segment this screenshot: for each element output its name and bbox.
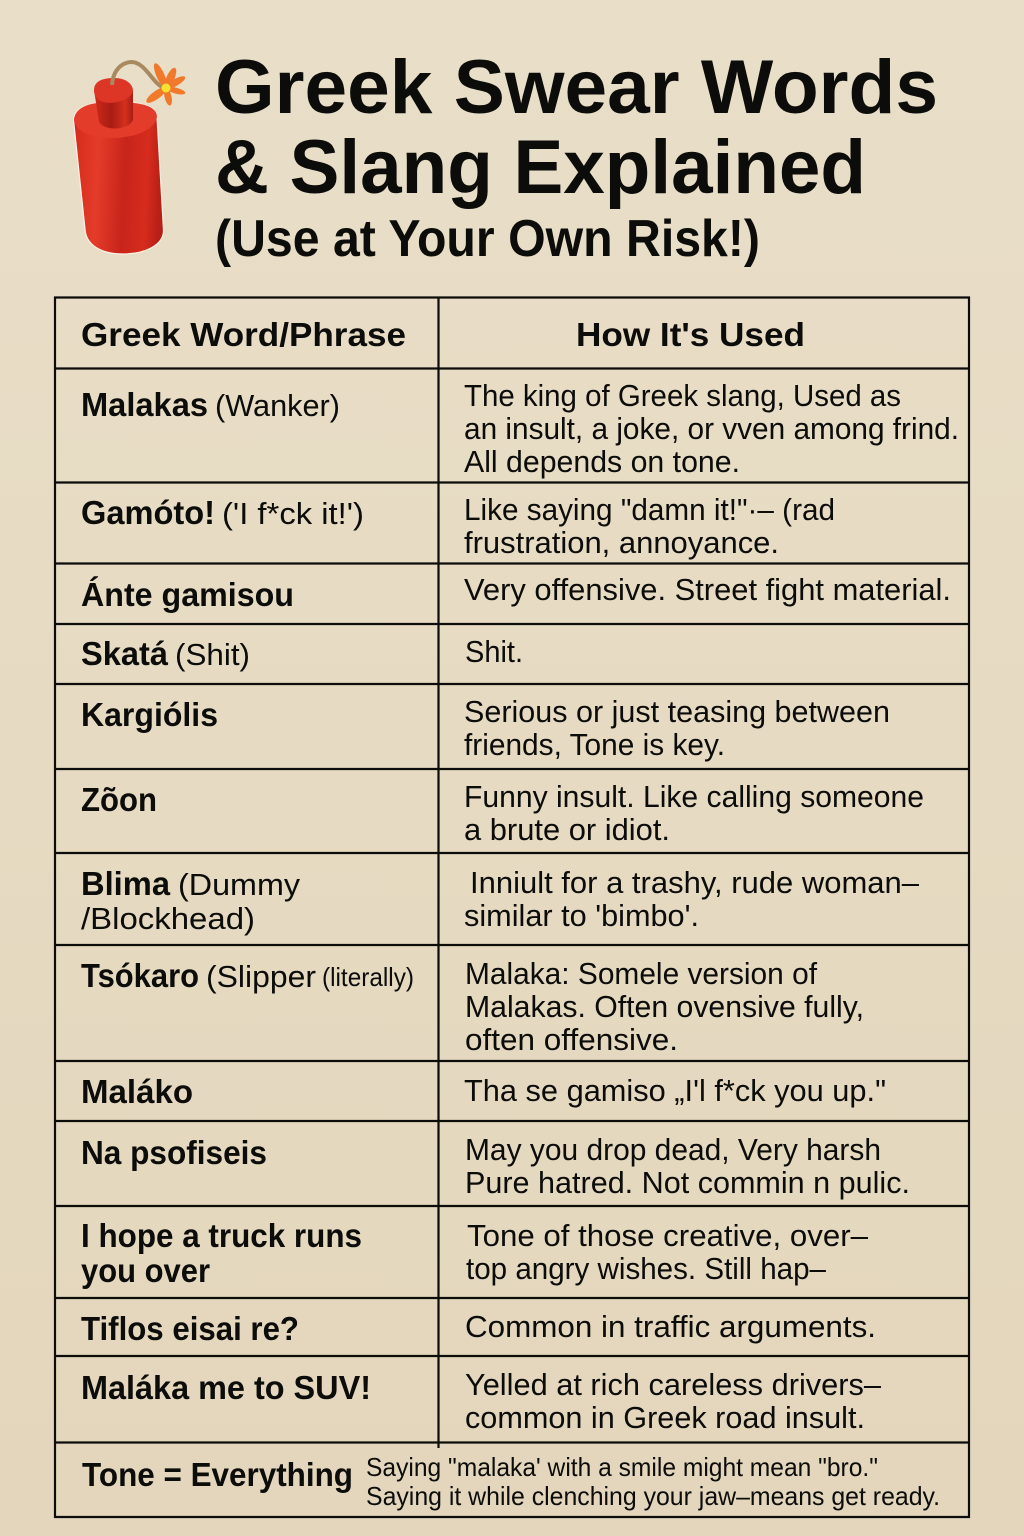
- row: SUV: [81, 1367, 882, 1435]
- row: Tiflos: Common in traffic arguments.: [465, 1309, 876, 1344]
- footer: tone note: [82, 1452, 940, 1511]
- row: Malako: Maláko: [81, 1073, 193, 1110]
- row: Zoon: Funny insult. Like calling someone: [464, 779, 924, 814]
- title: Greek Swear Words: [215, 45, 938, 130]
- row: Na psofiseis: [81, 1132, 910, 1200]
- row: Tsokaro: [81, 956, 864, 1057]
- row: Gamoto: Like saying "damn it!"·– (rad: [464, 492, 835, 527]
- row: Gamoto: ('I f*ck it!'): [222, 496, 364, 531]
- row: Tsokaro: (Slipper: [206, 959, 316, 994]
- row: Ante gamisou: Very offensive. Street fight material.: [464, 572, 951, 607]
- row: Skata: (Shit): [175, 637, 250, 672]
- icon: red firecracker bomb: [74, 62, 187, 254]
- row: Kargiolis: Serious or just teasing between: [464, 694, 890, 729]
- row: Malako: Tha se gamiso „I'l f*ck you up.": [464, 1073, 886, 1108]
- row: Ante gamisou: Ánte gamisou: [81, 576, 294, 613]
- table: [55, 297, 969, 1517]
- title: & Slang Explained: [215, 125, 866, 210]
- row: SUV: Maláka me to SUV!: [81, 1369, 371, 1406]
- row: Tsokaro: Malaka: Somele version of: [465, 956, 817, 991]
- row: Tsokaro: Malakas. Often ovensive fully,: [465, 989, 864, 1024]
- row: Zoon: Zõon: [81, 781, 157, 818]
- row: Skata: Shit.: [465, 634, 523, 669]
- icon: spark: [144, 62, 187, 106]
- row: truck: [81, 1217, 869, 1289]
- row: Blima: similar to 'bimbo'.: [464, 898, 699, 933]
- title: [215, 45, 938, 268]
- table header: How It's Used: [576, 316, 805, 353]
- footer: tone note: Saying it while clenching your jaw–means get ready.: [366, 1481, 940, 1511]
- row: Blima: Blima: [81, 865, 171, 902]
- row: Na psofiseis: May you drop dead, Very harsh: [465, 1132, 881, 1167]
- row: SUV: common in Greek road insult.: [465, 1400, 865, 1435]
- row: truck: I hope a truck runs: [81, 1217, 362, 1254]
- row: Zoon: [81, 779, 924, 847]
- row: Gamoto: frustration, annoyance.: [464, 525, 779, 560]
- row: Skata: [81, 634, 523, 672]
- row: Blima: Inniult for a trashy, rude woman–: [470, 865, 920, 900]
- row: truck: you over: [81, 1252, 210, 1289]
- row: Na psofiseis: Na psofiseis: [81, 1134, 267, 1171]
- title: (Use at Your Own Risk!): [215, 210, 760, 268]
- row: Tsokaro: often offensive.: [465, 1022, 678, 1057]
- row: Kargiolis: Kargiólis: [81, 696, 218, 733]
- row: Kargiolis: friends, Tone is key.: [464, 727, 725, 762]
- row: Blima: (Dummy: [178, 867, 301, 902]
- row: Gamoto: Gamóto!: [81, 494, 215, 531]
- row: Malakas: [81, 378, 959, 479]
- row: Malakas: (Wanker): [215, 388, 340, 423]
- row: Malako: [81, 1073, 886, 1110]
- row: Malakas: The king of Greek slang, Used as: [464, 378, 901, 413]
- row: Ante gamisou: [81, 572, 951, 613]
- footer: tone note: Tone = Everything: [82, 1456, 353, 1493]
- row: SUV: Yelled at rich careless drivers–: [465, 1367, 882, 1402]
- row: Kargiolis: [81, 694, 890, 762]
- row: Tsokaro: (literally): [322, 962, 414, 992]
- row: Tiflos: Tiflos eisai re?: [81, 1310, 299, 1347]
- table grid: [55, 297, 969, 1517]
- footer: tone note: Saying "malaka' with a smile might mean "bro.": [366, 1452, 878, 1482]
- row: truck: top angry wishes. Still hap–: [466, 1251, 827, 1286]
- row: Skata: Skatá: [81, 635, 169, 672]
- row: Blima: [81, 865, 920, 936]
- row: Malakas: All depends on tone.: [464, 444, 740, 479]
- table header: Greek Word/Phrase: [81, 316, 406, 353]
- table header: [81, 316, 805, 353]
- row: Malakas: an insult, a joke, or vven among frind.: [464, 411, 959, 446]
- row: Zoon: a brute or idiot.: [464, 812, 670, 847]
- row: Tsokaro: Tsókaro: [81, 957, 199, 994]
- row: Na psofiseis: Pure hatred. Not commin n pulic.: [465, 1165, 910, 1200]
- row: Gamoto: [81, 492, 835, 560]
- row: Blima: /Blockhead): [81, 901, 255, 936]
- row: Tiflos: [81, 1309, 876, 1347]
- row: truck: Tone of those creative, over–: [467, 1218, 869, 1253]
- row: Malakas: Malakas: [81, 386, 208, 423]
